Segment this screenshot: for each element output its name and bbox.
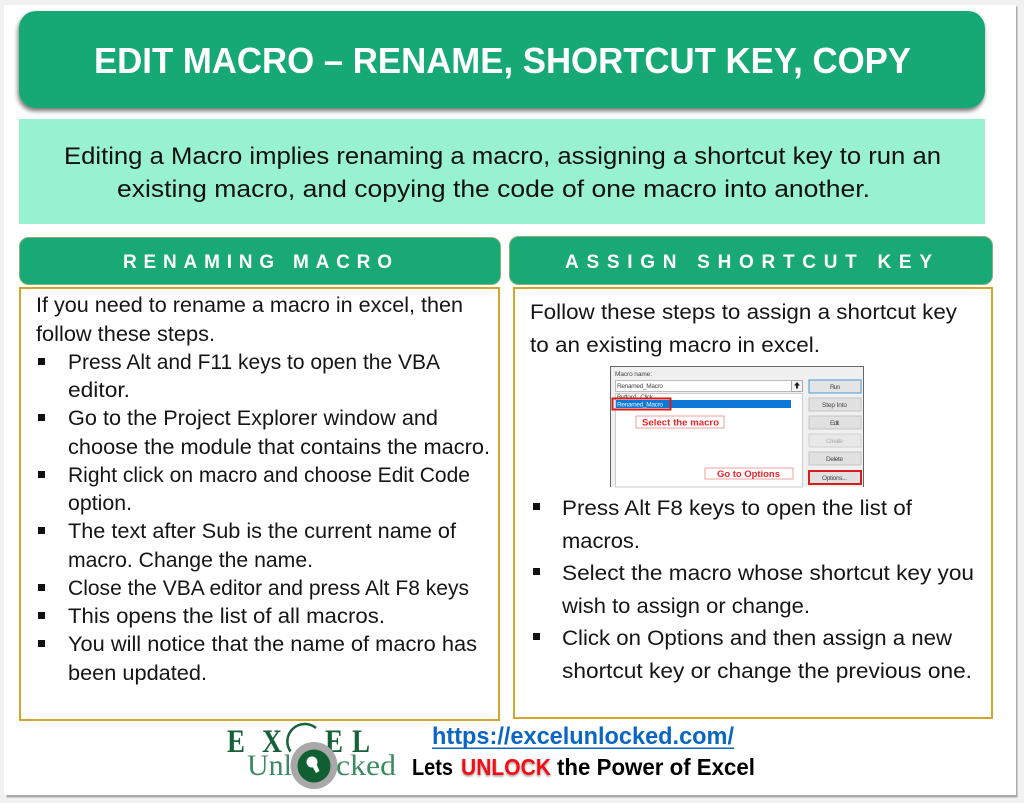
footer logo: Excel Unlocked	[227, 724, 396, 789]
macro dialog screenshot: Button1_Click	[617, 394, 654, 401]
heading: renaming macro	[20, 238, 500, 284]
text box: renaming steps: follow these steps.	[36, 322, 215, 346]
macro dialog screenshot: Edit	[830, 420, 839, 427]
intro text panel	[19, 119, 985, 224]
macro dialog screenshot: Go to Options	[717, 469, 780, 480]
macro dialog screenshot: Select the macro	[642, 418, 719, 428]
text box: shortcut steps: to an existing macro in excel.	[530, 333, 820, 357]
macro dialog screenshot: Create	[826, 438, 843, 445]
macro dialog screenshot: Renamed_Macro	[617, 383, 663, 390]
heading: renaming macro: RENAMING MACRO	[123, 252, 392, 273]
macro dialog screenshot: Delete	[826, 456, 843, 463]
panel: renaming macro	[20, 238, 500, 720]
text box: shortcut steps: shortcut key or change the previous one.	[562, 659, 972, 683]
macro dialog screenshot	[610, 366, 864, 487]
text box: renaming steps: macro. Change the name.	[68, 548, 313, 572]
intro text panel: existing macro, and copying the code of one macro into another.	[117, 176, 870, 203]
macro dialog screenshot: Options...	[822, 475, 847, 482]
text box: shortcut steps: Click on Options and then assign a new	[562, 626, 952, 650]
text box: renaming steps: choose the module that contains the macro.	[68, 435, 490, 459]
tagline: UNLOCK	[461, 754, 551, 780]
title banner: EDIT MACRO – RENAME, SHORTCUT KEY, COPY	[94, 40, 911, 81]
intro text panel: Editing a Macro implies renaming a macro, assigning a shortcut key to run an	[64, 143, 941, 170]
panel: assign shortcut key	[510, 236, 992, 718]
text box: shortcut steps: macros.	[562, 529, 640, 553]
text box: shortcut steps: Select the macro whose shortcut key you	[562, 561, 974, 585]
macro dialog screenshot: Run	[830, 384, 840, 391]
footer logo: Excel Unlocked: E	[325, 724, 343, 760]
website link: https://excelunlocked.com/	[432, 723, 734, 750]
text box: shortcut steps	[514, 288, 992, 718]
title banner	[19, 11, 985, 108]
text box: renaming steps: editor.	[68, 378, 130, 402]
text box: renaming steps: Close the VBA editor and press Alt F8 keys	[68, 576, 469, 600]
text box: renaming steps: Right click on macro and choose Edit Code	[68, 463, 470, 487]
text box: renaming steps: Go to the Project Explorer window and	[68, 406, 438, 430]
text box: renaming steps: If you need to rename a macro in excel, then	[36, 293, 463, 317]
tagline: Lets	[412, 754, 453, 780]
icon: lock	[287, 724, 338, 789]
footer logo: Excel Unlocked: Unl	[247, 749, 292, 782]
text box: renaming steps	[20, 288, 499, 720]
macro dialog screenshot: Step Into	[822, 402, 847, 409]
text box: renaming steps: Press Alt and F11 keys to open the VBA	[68, 350, 441, 374]
footer logo: Excel Unlocked: L	[352, 724, 370, 760]
footer logo: Excel Unlocked: cked	[336, 749, 396, 782]
text box: shortcut steps: Press Alt F8 keys to open the list of	[562, 496, 912, 520]
text box: renaming steps: been updated.	[68, 661, 207, 685]
text box: renaming steps: option.	[68, 491, 132, 515]
footer logo: Excel Unlocked: E	[227, 724, 245, 760]
text box: renaming steps: The text after Sub is the current name of	[68, 519, 456, 543]
tagline	[412, 754, 755, 780]
text box: shortcut steps: wish to assign or change.	[561, 594, 810, 618]
heading: assign shortcut key: ASSIGN SHORTCUT KEY	[565, 252, 932, 273]
footer logo: Excel Unlocked: X	[262, 724, 282, 760]
tagline: the Power of Excel	[557, 754, 755, 780]
text box: renaming steps: You will notice that the name of macro has	[68, 632, 477, 656]
text box: renaming steps: This opens the list of all macros.	[68, 604, 385, 628]
text box: shortcut steps: Follow these steps to assign a shortcut key	[530, 300, 957, 324]
macro dialog screenshot: Macro name:	[615, 371, 652, 378]
heading: assign shortcut key	[510, 236, 992, 284]
macro dialog screenshot: Renamed_Macro	[617, 402, 663, 408]
